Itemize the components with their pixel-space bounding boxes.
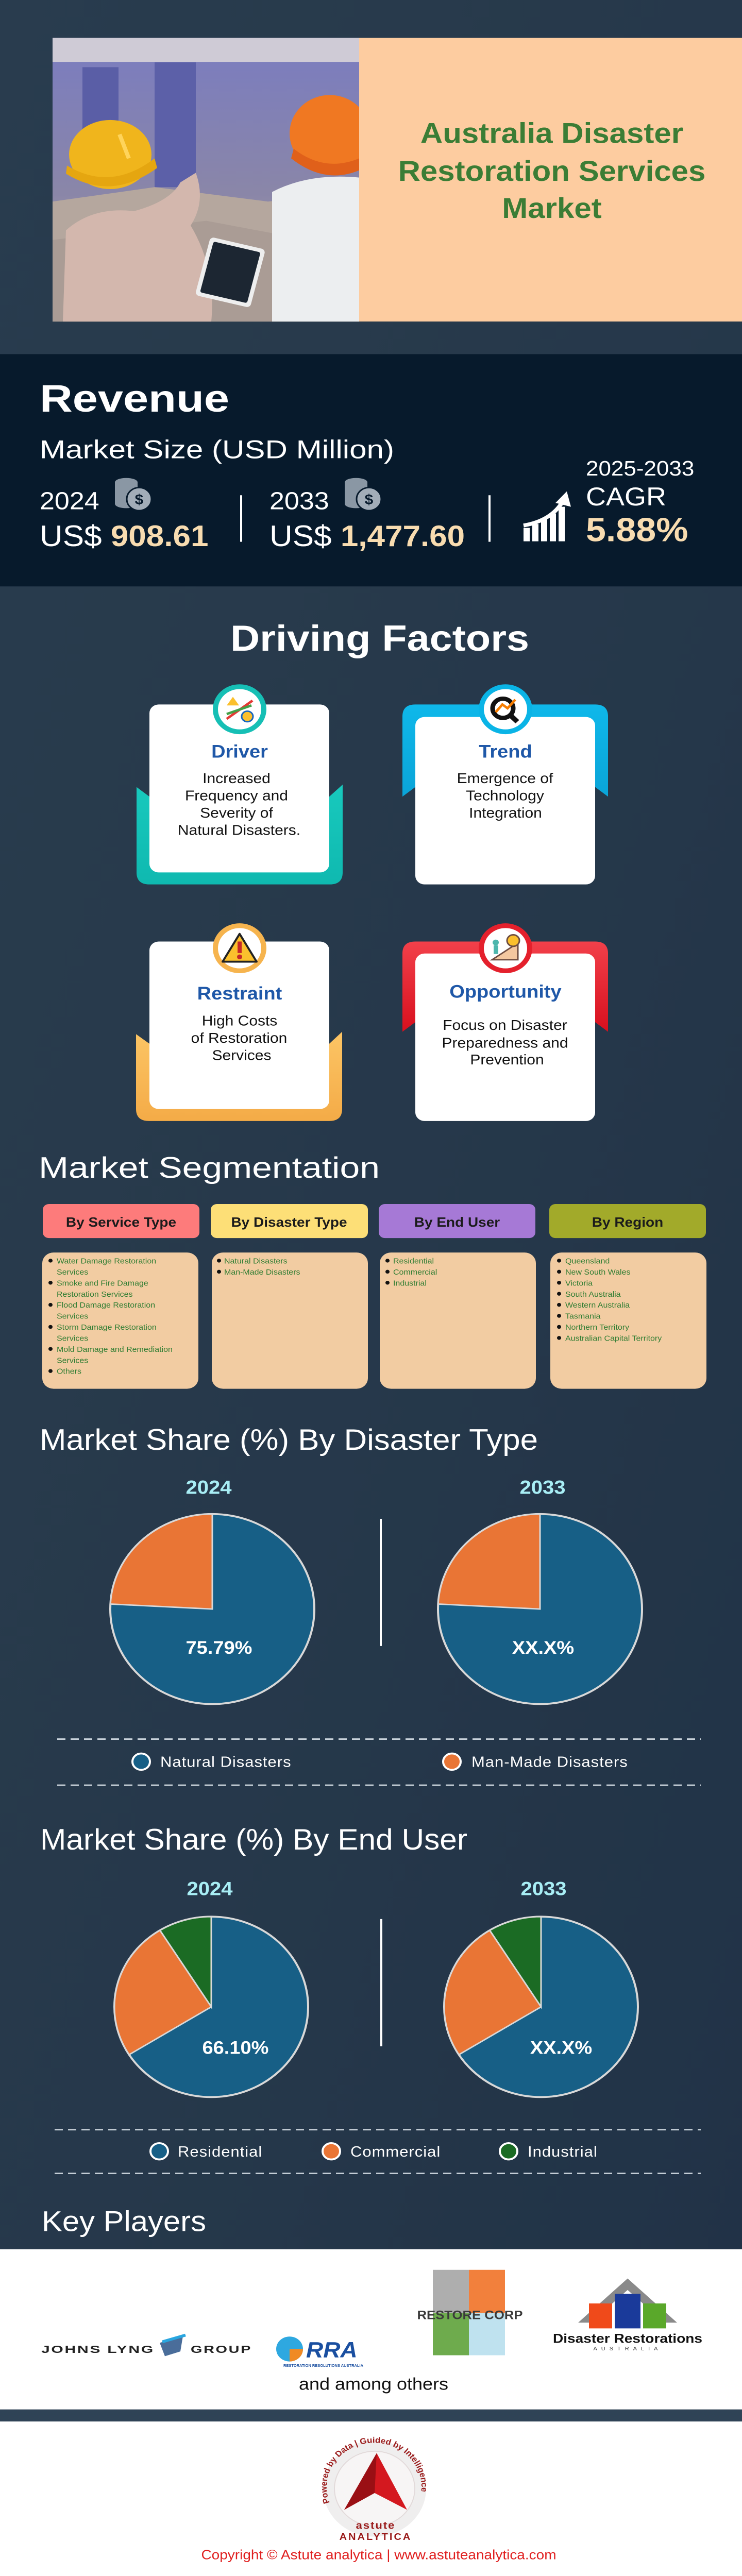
icon: warning (213, 923, 266, 973)
card: trend: Integration (469, 805, 542, 821)
legend: end user (55, 2130, 701, 2174)
segmentation: by end user: Commercial (393, 1268, 437, 1277)
segmentation: by disaster type: Natural Disasters (224, 1257, 288, 1265)
market size label: Market Size (USD Million) (40, 435, 394, 464)
segmentation: by service type (42, 1204, 199, 1389)
pie chart: disaster type 2024: 75.79% (186, 1637, 252, 1657)
stat 2033: 2033 (269, 487, 329, 515)
title box (359, 38, 742, 321)
segmentation: by service type: Storm Damage Restoration (57, 1324, 157, 1332)
pie chart: disaster type 2033: 2033 (520, 1477, 565, 1498)
stat 2033: US$ 1,477.60 (269, 519, 465, 553)
heading: Key Players: Key Players (42, 2206, 206, 2238)
segmentation: by region: Western Australia (565, 1301, 630, 1310)
segmentation: by service type: Smoke and Fire Damage (57, 1279, 148, 1287)
icon: driver (213, 684, 266, 734)
card: trend: Trend (479, 741, 532, 761)
title box: Restoration Services (398, 156, 705, 188)
CAGR: 5.88% (586, 512, 688, 549)
footer (0, 2409, 742, 2576)
logo: RRA: RESTORATION RESOLUTIONS AUSTRALIA (283, 2363, 364, 2368)
segmentation: by service type: Services (57, 1357, 89, 1365)
icon: opportunity (479, 923, 532, 973)
text: and among others: and among others (299, 2375, 448, 2394)
icon: coins 2024 (115, 478, 151, 511)
heading: Driving Factors: Driving Factors (230, 618, 529, 658)
pie chart: end user 2024: 66.10% (203, 2038, 268, 2058)
pie chart: end user 2024 (114, 1878, 308, 2097)
legend: disaster type (57, 1739, 701, 1785)
key players panel (0, 2249, 742, 2410)
card: opportunity (402, 923, 608, 1121)
card: driver: Frequency and (185, 788, 288, 804)
icon: growth chart (524, 492, 571, 541)
icon: coins 2033: $ (365, 492, 373, 508)
logo: Disaster Restorations Australia (553, 2279, 702, 2352)
segmentation: by service type: Services (57, 1268, 89, 1277)
segmentation: by region: Queensland (565, 1257, 610, 1265)
copyright: Copyright © Astute analytica | www.astuteanalytica.com (201, 2547, 556, 2562)
segmentation: by service type: Services (57, 1312, 89, 1320)
logo: Johns Lyng Group: JOHNS LYNG (41, 2344, 155, 2355)
logo: astute analytica (322, 2437, 427, 2543)
segmentation: by end user: Industrial (393, 1279, 427, 1287)
card: driver: Severity of (200, 805, 274, 821)
card: driver (137, 684, 343, 885)
card: opportunity: Opportunity (449, 981, 562, 1002)
legend: end user: Commercial (350, 2144, 441, 2160)
divider (240, 495, 242, 542)
logo: Restore Corp (417, 2270, 522, 2355)
card: driver: Driver (211, 741, 268, 761)
logo: astute analytica: Powered by Data | Guided by Intelligence (322, 2437, 427, 2504)
card: opportunity: Prevention (470, 1052, 544, 1068)
segmentation: by region: By Region (592, 1215, 663, 1230)
logo: astute analytica: ANALYTICA (340, 2532, 412, 2543)
card: driver: Natural Disasters. (178, 823, 300, 838)
card: restraint: Restraint (197, 983, 282, 1004)
segmentation: by service type: Restoration Services (57, 1290, 133, 1299)
logo: Disaster Restorations Australia: Disaster Restorations (553, 2331, 702, 2346)
card: restraint (136, 923, 342, 1121)
CAGR: CAGR (586, 482, 666, 511)
card: trend (402, 684, 608, 885)
segmentation: by region: South Australia (565, 1290, 621, 1299)
segmentation: by disaster type (211, 1204, 368, 1389)
segmentation: by region: Australian Capital Territory (565, 1334, 662, 1343)
pie chart: end user 2033 (444, 1878, 638, 2097)
segmentation: by region: Northern Territory (565, 1324, 629, 1332)
title box: Australia Disaster (420, 117, 683, 149)
CAGR (586, 457, 694, 549)
pie chart: end user 2024: 2024 (187, 1878, 233, 1900)
pie chart: end user 2033: 2033 (521, 1878, 566, 1900)
header panel (53, 38, 742, 321)
icon: coins 2033 (345, 478, 381, 511)
stat 2033 (269, 487, 465, 553)
logo: Johns Lyng Group (41, 2335, 252, 2356)
photo: workers at disaster site (53, 38, 370, 321)
card: opportunity: Preparedness and (442, 1035, 568, 1051)
pie chart: disaster type 2033: XX.X% (512, 1637, 574, 1657)
logo: Disaster Restorations Australia: AUSTRALIA (593, 2346, 662, 2352)
pie chart: disaster type 2024: 2024 (186, 1477, 232, 1498)
stat 2024: 2024 (40, 487, 99, 515)
segmentation: by region: New South Wales (565, 1268, 631, 1277)
segmentation: by region: Tasmania (565, 1312, 601, 1320)
segmentation: by end user (379, 1204, 536, 1389)
segmentation: by service type: Flood Damage Restoration (57, 1301, 155, 1310)
heading: Market Segmentation: Market Segmentation (39, 1151, 380, 1184)
segmentation: by region (549, 1204, 706, 1389)
logo: RRA: RRA (306, 2338, 358, 2362)
segmentation: by service type: Others (57, 1367, 81, 1376)
segmentation: by service type: By Service Type (66, 1215, 176, 1230)
legend: end user: Industrial (528, 2144, 598, 2160)
logo: Restore Corp: RESTORE CORP (417, 2308, 522, 2322)
revenue panel (0, 354, 742, 586)
legend: disaster type: Natural Disasters (160, 1754, 292, 1770)
logo: RRA (276, 2336, 364, 2368)
pie chart: disaster type 2024 (110, 1477, 314, 1704)
legend: end user: Residential (178, 2144, 262, 2160)
revenue heading: Revenue (40, 378, 229, 420)
segmentation: by service type: Mold Damage and Remediation (57, 1345, 173, 1354)
card: restraint: of Restoration (191, 1030, 287, 1046)
heading: market share by end user: Market Share (%) By End User (40, 1823, 467, 1856)
card: trend: Emergence of (457, 771, 553, 787)
segmentation: by end user: Residential (393, 1257, 434, 1265)
segmentation: by disaster type: Man-Made Disasters (224, 1268, 300, 1277)
pie chart: end user 2033: XX.X% (530, 2038, 592, 2058)
CAGR: 2025-2033 (586, 457, 694, 481)
card: restraint: Services (212, 1047, 271, 1063)
segmentation: by disaster type: By Disaster Type (231, 1215, 347, 1230)
stat 2024 (40, 487, 208, 553)
stat 2024: US$ 908.61 (40, 519, 208, 553)
card: trend: Technology (466, 788, 544, 804)
title box: Market (502, 193, 602, 224)
heading: market share by disaster type: Market Share (%) By Disaster Type (40, 1423, 538, 1456)
segmentation: by service type: Water Damage Restoration (57, 1257, 156, 1265)
card: driver: Increased (203, 771, 271, 787)
legend: disaster type: Man-Made Disasters (471, 1754, 628, 1770)
logo: astute analytica: astute (356, 2519, 395, 2532)
icon: coins 2024: $ (135, 492, 143, 508)
segmentation: by service type: Services (57, 1334, 89, 1343)
pie chart: disaster type 2033 (438, 1477, 642, 1704)
card: restraint: High Costs (202, 1013, 277, 1029)
icon: trend (479, 684, 532, 734)
segmentation: by end user: By End User (414, 1215, 500, 1230)
logo: Johns Lyng Group: GROUP (191, 2344, 252, 2355)
segmentation: by region: Victoria (565, 1279, 593, 1287)
card: opportunity: Focus on Disaster (443, 1018, 567, 1033)
